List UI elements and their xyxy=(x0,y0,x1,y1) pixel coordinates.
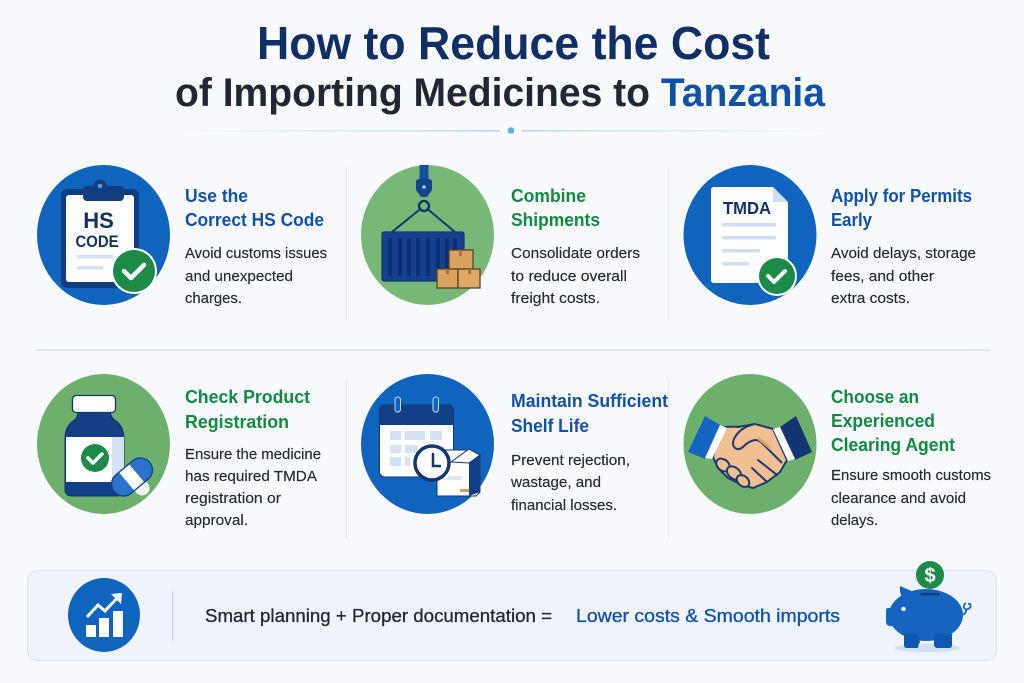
icon: HS code clipboard xyxy=(37,165,170,305)
text block: freight costs. xyxy=(511,290,600,307)
text block: Consolidate orders xyxy=(511,245,640,262)
heading: Correct HS Code xyxy=(185,210,324,230)
icon: crane container with boxes xyxy=(361,165,494,305)
text block: Ensure smooth customs xyxy=(831,467,991,484)
icon: TMDA document: TMDA xyxy=(723,198,771,218)
text block: financial losses. xyxy=(511,497,617,514)
text block: charges. xyxy=(185,290,242,307)
summary text: Lower costs & Smooth imports xyxy=(576,606,840,626)
text block: Avoid delays, storage xyxy=(831,245,976,262)
text block: clearance and avoid xyxy=(831,490,966,507)
title: How to Reduce the Cost xyxy=(257,17,770,69)
heading: Registration xyxy=(185,412,289,432)
heading: Use the xyxy=(185,186,248,206)
icon: calendar, clock and box xyxy=(361,374,494,514)
title: of Importing Medicines to Tanzania xyxy=(175,71,826,115)
heading: Experienced xyxy=(831,411,935,431)
text block: wastage, and xyxy=(510,474,601,491)
text block: registration or xyxy=(185,490,281,507)
summary text: Smart planning + Proper documentation = xyxy=(205,606,552,626)
text block: extra costs. xyxy=(831,290,910,307)
icon: TMDA document xyxy=(684,165,816,305)
panel: choose an experienced clearing agent xyxy=(684,374,991,529)
icon: handshake xyxy=(684,374,816,514)
panel: summary banner xyxy=(28,561,996,660)
panel: apply for permits early xyxy=(684,165,976,307)
panel: check product registration xyxy=(37,374,321,529)
icon: HS code clipboard: CODE xyxy=(76,232,118,251)
heading: Shelf Life xyxy=(511,416,589,436)
icon: piggy bank with dollar coin xyxy=(886,561,971,652)
panel: use the correct HS code xyxy=(37,165,327,307)
title xyxy=(175,17,826,115)
heading: Check Product xyxy=(185,387,310,407)
icon: rising bar chart xyxy=(68,578,140,652)
text block: has required TMDA xyxy=(185,468,317,485)
heading: Choose an xyxy=(831,387,919,407)
text block: delays. xyxy=(831,512,878,529)
text block: Ensure the medicine xyxy=(185,446,321,463)
heading: Early xyxy=(831,210,872,230)
heading: Apply for Permits xyxy=(831,186,972,206)
icon: piggy bank with dollar coin: $ xyxy=(924,565,936,587)
heading: Shipments xyxy=(511,210,600,230)
text block: to reduce overall xyxy=(511,268,627,285)
text block: Avoid customs issues xyxy=(185,245,327,262)
heading: Combine xyxy=(511,186,586,206)
panel: combine shipments xyxy=(361,165,640,307)
heading: Clearing Agent xyxy=(831,435,955,455)
text block: and unexpected xyxy=(185,268,293,285)
text block: fees, and other xyxy=(831,268,934,285)
text block: approval. xyxy=(185,512,248,529)
icon: medicine bottle and capsule xyxy=(37,374,170,514)
heading: Maintain Sufficient xyxy=(511,391,668,411)
icon: HS code clipboard: HS xyxy=(83,208,114,233)
panel: maintain sufficient shelf life xyxy=(361,374,668,514)
text block: Prevent rejection, xyxy=(511,452,630,469)
